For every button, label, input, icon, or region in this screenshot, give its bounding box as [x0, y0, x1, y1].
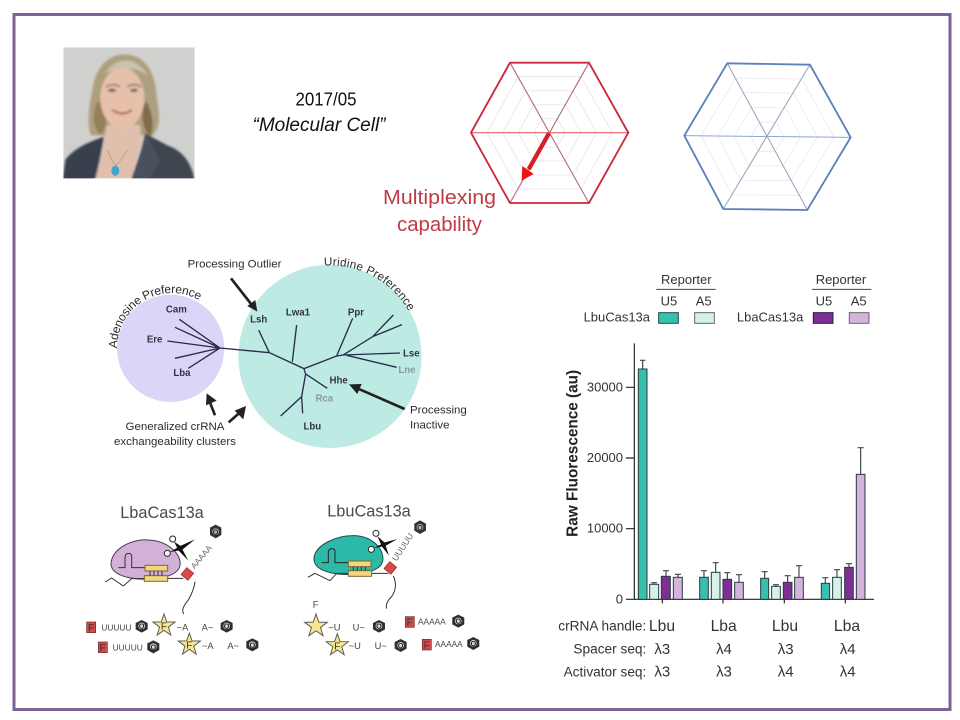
chart legend: Reporter: [661, 272, 712, 287]
cleavage products: F: [424, 640, 430, 651]
cleavage products: U~: [353, 622, 365, 632]
panel: phylogenetic tree: Uridine Preference: [324, 257, 413, 310]
cleavage products: Q: [224, 622, 230, 631]
cleavage products: Q: [249, 640, 255, 649]
cleavage products: F: [88, 623, 94, 634]
adenosine cluster circle: [117, 295, 224, 402]
species labels: Lne: [398, 365, 416, 376]
uridine cluster circle: [238, 265, 422, 448]
chart legend: U5: [661, 293, 677, 308]
hair: [89, 54, 159, 137]
species labels: Hhe: [330, 375, 348, 386]
species labels: Lsh: [250, 315, 267, 326]
condition table: [558, 618, 860, 681]
cleavage products: UUUUU: [101, 622, 131, 632]
cleavage products: F: [186, 641, 192, 652]
LbuCas13a heading: LbuCas13a: [327, 503, 412, 521]
group 1 bars: [638, 369, 682, 599]
callout labels: Processing Outlier: [188, 259, 282, 271]
condition table: λ3: [716, 664, 732, 681]
curved cluster labels: [117, 293, 204, 348]
necklace: [107, 150, 127, 166]
cleavage products: AAAAA: [418, 617, 446, 627]
y axis values: 10000: [587, 521, 623, 536]
cleavage products: UUUUU: [113, 642, 143, 652]
y axis and ticks: [626, 343, 874, 603]
species labels: [147, 304, 420, 433]
condition table: Lba: [834, 618, 860, 635]
y axis values: 0: [616, 592, 623, 607]
cleavage products: A~: [227, 641, 240, 651]
condition table: λ4: [840, 641, 856, 658]
condition table: Spacer seq:: [573, 642, 646, 657]
cleavage products: Q: [398, 641, 404, 650]
Lba enzyme: [105, 525, 221, 614]
condition table: Activator seq:: [564, 665, 646, 680]
condition table: λ3: [654, 641, 670, 658]
chart legend: U5: [816, 293, 832, 308]
y axis values: 20000: [587, 450, 623, 465]
panel: Cas13a cleavage diagrams: [87, 503, 479, 655]
condition table: λ4: [716, 641, 732, 658]
Lba enzyme: Q: [213, 527, 219, 536]
cleavage products: Q: [455, 617, 461, 626]
jacket: [63, 137, 104, 180]
cleavage products: Q: [376, 622, 382, 631]
chart legend: A5: [851, 293, 867, 308]
red radar hexagon: [471, 63, 628, 203]
cleavage products: Q: [470, 639, 476, 648]
chart legend: Reporter: [816, 272, 867, 287]
cleavage products: AAAAA: [435, 639, 463, 649]
y axis values: [587, 379, 623, 607]
cleavage products: F: [100, 643, 106, 654]
callout labels: exchangeability clusters: [114, 436, 236, 448]
species labels: Lwa1: [286, 307, 311, 318]
callout labels: [114, 259, 467, 448]
panel: phylogenetic tree: [108, 257, 467, 448]
cleavage products: Q: [139, 622, 145, 631]
chart legend: [584, 272, 871, 325]
condition table: Lbu: [649, 618, 675, 635]
species labels: Cam: [166, 304, 187, 315]
Lbu enzyme: UUUUU: [390, 531, 415, 563]
cleavage products: F: [334, 641, 340, 652]
species labels: Ppr: [348, 308, 364, 319]
bar chart: [558, 343, 874, 681]
cleavage products: F: [407, 618, 413, 629]
scissors: [374, 536, 397, 556]
condition table: Lbu: [772, 618, 798, 635]
multiplexing capability label: Multiplexing: [383, 187, 496, 209]
cleavage products: Q: [150, 642, 156, 651]
condition table: λ3: [778, 641, 794, 658]
multiplexing capability label: [383, 187, 496, 236]
callout labels: Processing: [410, 405, 467, 417]
Lbu enzyme: [308, 520, 426, 609]
group 4 bars: [821, 474, 865, 599]
cleavage products: F: [313, 600, 319, 611]
chart legend: A5: [696, 293, 712, 308]
group 2 bars: [700, 572, 743, 599]
cleavage products: ~A: [177, 622, 189, 632]
callout labels: Inactive: [410, 420, 450, 432]
species labels: Rca: [315, 393, 334, 404]
species labels: Lba: [173, 368, 191, 379]
species labels: Ere: [147, 334, 163, 345]
species labels: Lse: [403, 348, 420, 359]
panel: phylogenetic tree: Adenosine Preference: [108, 285, 201, 348]
condition table: λ4: [840, 664, 856, 681]
citation text: “Molecular Cell”: [252, 115, 387, 136]
callout arrows: [210, 278, 405, 422]
y axis title: Raw Fluorescence (au): [564, 370, 581, 537]
arrow: multiplexing axis: [522, 133, 549, 181]
LbaCas13a heading: LbaCas13a: [120, 504, 205, 522]
chart legend: LbuCas13a: [584, 310, 651, 325]
citation text: [252, 90, 387, 136]
blue radar hexagon: [684, 63, 851, 210]
condition table: Lba: [711, 618, 737, 635]
chart legend: LbaCas13a: [737, 310, 804, 325]
callout labels: Generalized crRNA: [126, 421, 225, 433]
cleavage products: ~U: [349, 641, 361, 651]
citation text: 2017/05: [296, 90, 356, 110]
cleavage products: [87, 600, 479, 655]
multiplexing capability label: capability: [397, 214, 482, 236]
Lba enzyme: AAAAA: [188, 543, 214, 571]
cleavage products: A~: [202, 622, 214, 632]
condition table: λ3: [654, 664, 670, 681]
condition table: λ4: [778, 664, 794, 681]
group 3 bars: [761, 577, 803, 599]
tree branches: [167, 315, 402, 416]
portrait photo: [63, 47, 195, 180]
cleavage products: U~: [375, 641, 387, 651]
cleavage products: F: [161, 621, 167, 632]
condition table: crRNA handle:: [558, 619, 646, 634]
cleavage products: ~U: [328, 622, 341, 632]
error bars: [640, 360, 864, 586]
face: [100, 68, 144, 129]
species labels: Lbu: [303, 422, 321, 433]
cleavage products: ~A: [202, 641, 214, 651]
Lbu enzyme: Q: [417, 523, 423, 532]
y axis values: 30000: [587, 379, 623, 394]
neck and chest: [95, 125, 142, 178]
scissors: [170, 539, 195, 561]
